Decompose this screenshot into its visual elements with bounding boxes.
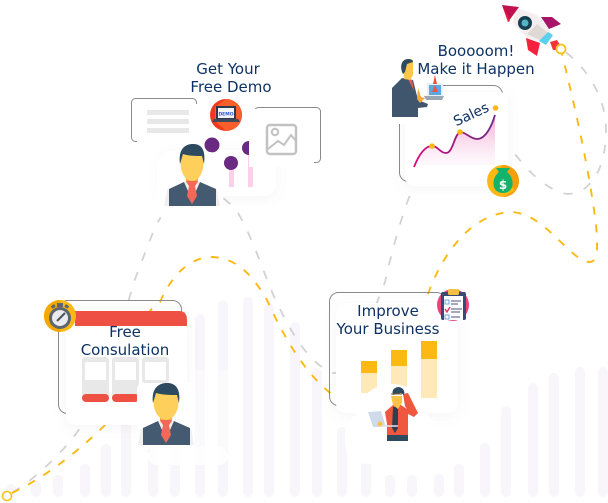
area chart	[414, 105, 498, 167]
card outline	[400, 86, 502, 182]
icon: stopwatch	[44, 300, 76, 332]
icon: money bag: $	[499, 178, 507, 192]
icon: entrepreneur with laptop	[392, 59, 444, 117]
icon: demo laptop: DEMO	[218, 112, 234, 118]
red header bar	[75, 311, 187, 326]
chart label: sales: Sales	[451, 100, 492, 130]
icon: rocket	[502, 5, 563, 56]
card surface	[336, 303, 458, 413]
end marker ring	[556, 44, 566, 54]
start marker ring	[2, 492, 12, 500]
panel: free consultation	[58, 300, 187, 425]
icon: consultant figure	[138, 383, 194, 445]
person backing: consultant	[137, 370, 228, 465]
person backing: demo presenter	[157, 152, 223, 222]
person backing: entrepreneur	[372, 72, 434, 124]
heading: free consulation: Free	[109, 323, 141, 341]
background bar pattern	[6, 297, 608, 497]
heading: improve your business: Your Business	[336, 320, 440, 338]
heading: improve your business: Improve	[357, 302, 419, 320]
icon: clipboard checklist	[437, 289, 469, 321]
card outline	[58, 300, 182, 414]
pricing columns	[82, 357, 169, 402]
heading: make it happen: Make it Happen	[417, 60, 535, 78]
icon: money bag	[487, 165, 519, 197]
icon: analyst with laptop	[368, 387, 418, 441]
heading: get your free demo: Free Demo	[190, 78, 272, 96]
panel: demo chart backing	[160, 150, 276, 196]
icon: presenter figure	[164, 144, 220, 206]
panel: improve your business	[330, 292, 458, 413]
panel: image card	[249, 108, 320, 167]
icon: demo laptop	[210, 99, 242, 131]
card surface	[66, 311, 187, 425]
card outline	[330, 292, 446, 406]
panel: sales chart	[400, 86, 508, 186]
heading: get your free demo: Get Your	[196, 60, 261, 78]
chart: lollipop markers	[204, 138, 256, 187]
bar chart	[361, 341, 437, 398]
heading: free consulation: Consulation	[81, 341, 169, 359]
card surface	[405, 92, 508, 186]
panel: text card	[132, 98, 200, 144]
person backing: analyst	[345, 384, 437, 464]
heading: make it happen: Booooom!	[438, 42, 514, 60]
